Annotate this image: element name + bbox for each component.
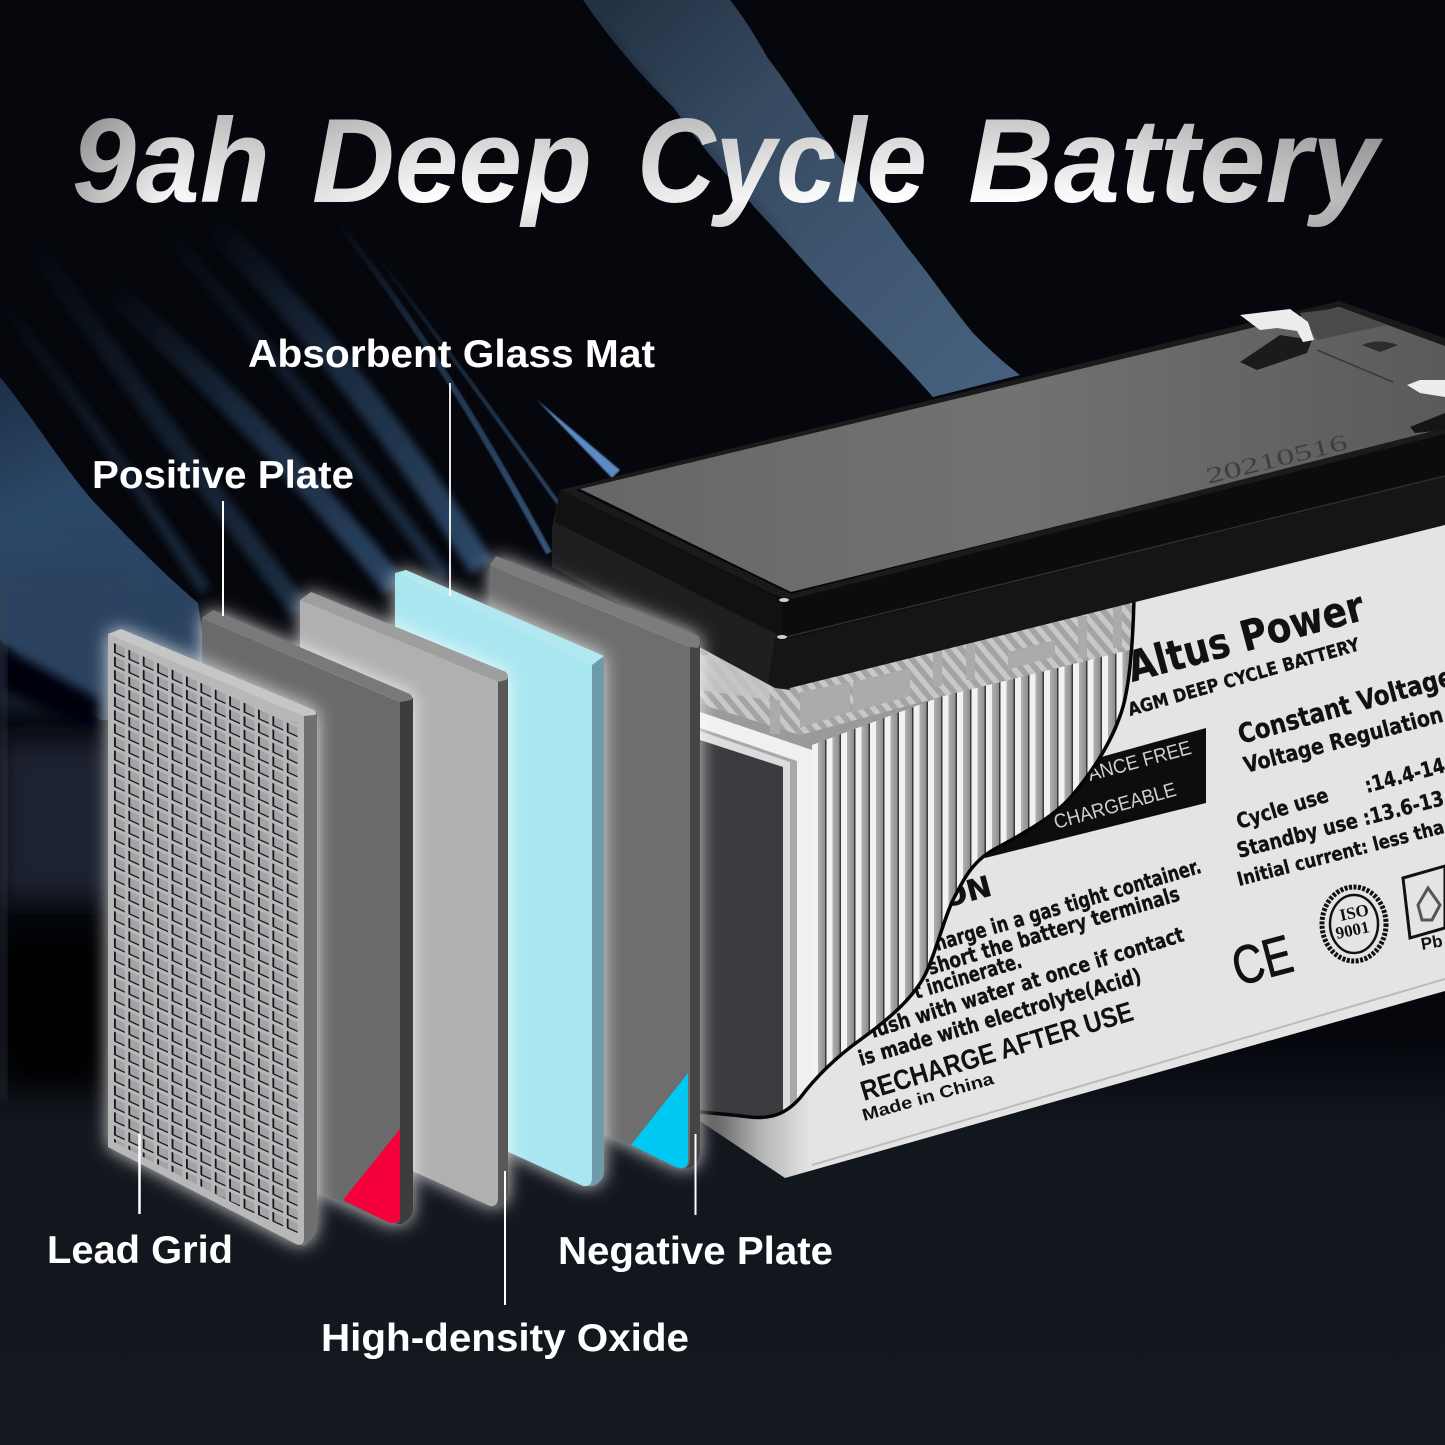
negative plate <box>490 556 700 1169</box>
battery internals cutaway <box>700 590 1140 1130</box>
caution text: lush with water at once if contact <box>867 923 1187 1043</box>
title: Battery <box>968 94 1383 228</box>
specification text <box>1233 662 1445 891</box>
caution text: Made in China <box>860 1069 996 1125</box>
battery lid <box>552 301 1445 690</box>
terminal recess <box>1300 308 1387 340</box>
positive plate <box>202 610 413 1224</box>
title: 9ah <box>72 94 270 228</box>
title <box>72 94 1383 228</box>
certification marks: ISO <box>1338 900 1370 925</box>
caution text: short the battery terminals <box>925 882 1183 980</box>
battery <box>552 301 1445 1178</box>
internal plate stack <box>812 650 1130 1080</box>
absorbent glass mat <box>395 570 604 1186</box>
brand text: AGM DEEP CYCLE BATTERY <box>1126 634 1363 721</box>
specification text: Cycle use <box>1233 783 1331 834</box>
front plate frame <box>700 712 812 1130</box>
caution text: is made with electrolyte(Acid) <box>856 964 1144 1071</box>
lead grid <box>108 629 317 1246</box>
date code: 20210516 <box>1203 430 1350 489</box>
title: Deep <box>312 94 592 228</box>
caution text: harge in a gas tight container. <box>932 854 1204 956</box>
certification marks: Pb <box>1419 931 1444 954</box>
title: Cycle <box>637 94 927 228</box>
terminal tab one <box>1240 309 1314 370</box>
callout: lead grid: Lead Grid <box>47 1229 233 1272</box>
caution text: t incinerate. <box>911 949 1025 1004</box>
black maintenance panel <box>985 728 1206 858</box>
battery label face <box>700 520 1445 1178</box>
dark front panel <box>700 740 783 1130</box>
callout: absorbent glass mat: Absorbent Glass Mat <box>248 333 655 376</box>
exploded plates <box>108 556 700 1246</box>
brand text <box>1122 581 1370 721</box>
plate connectors <box>770 606 1122 734</box>
diagonal fold streaks <box>0 220 561 610</box>
brand text: Altus Power <box>1122 581 1370 692</box>
terminal tab two <box>1407 380 1445 433</box>
black maintenance panel: CHARGEABLE <box>1051 779 1179 834</box>
caution text <box>856 854 1204 1125</box>
callout: positive plate: Positive Plate <box>92 454 354 497</box>
certification marks: CE <box>1226 924 1299 998</box>
black maintenance panel: ANCE FREE <box>1086 737 1194 786</box>
certification marks <box>1226 866 1445 998</box>
caution text: RECHARGE AFTER USE <box>857 996 1137 1107</box>
caution text: ON <box>938 869 995 915</box>
high-density oxide <box>300 592 508 1206</box>
certification marks: 9001 <box>1334 917 1371 943</box>
callout: high-density oxide: High-density Oxide <box>321 1317 689 1360</box>
callout: negative plate: Negative Plate <box>558 1230 833 1273</box>
